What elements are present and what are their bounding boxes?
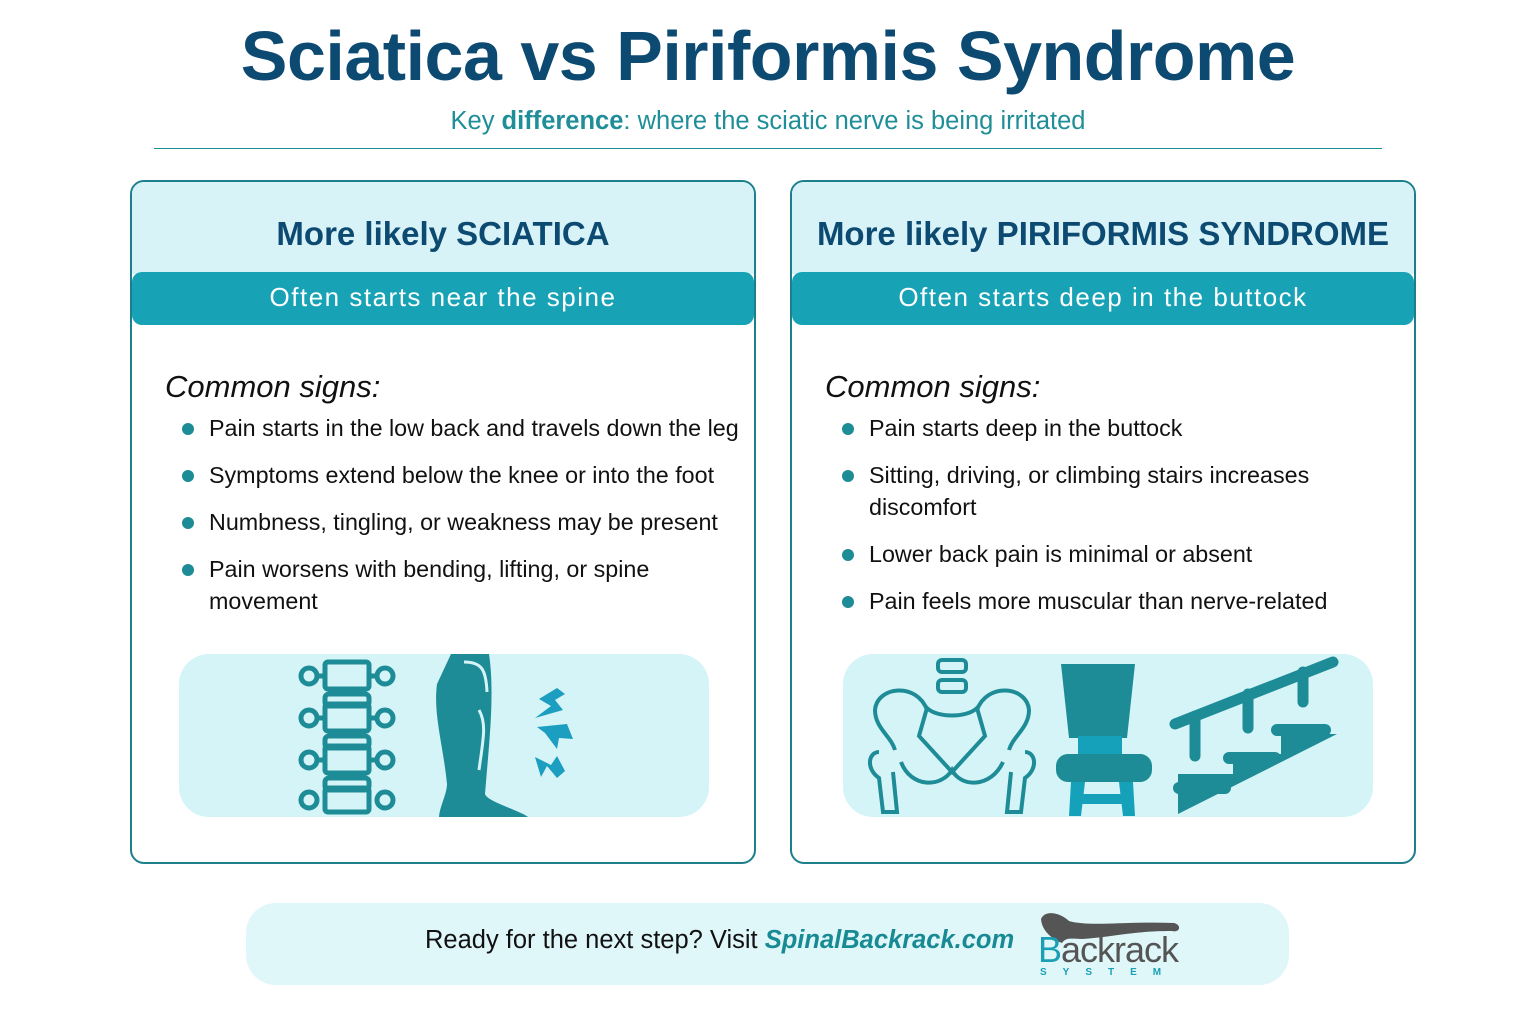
subtitle: Key difference: where the sciatic nerve is being irritated (451, 107, 1085, 135)
text: common signs: Common signs: (825, 369, 1040, 404)
logo: backrack: Backrack (1038, 929, 1178, 970)
text: common signs: Common signs: (165, 369, 380, 404)
footer banner (246, 903, 1289, 985)
icon: pelvis (870, 660, 1034, 812)
icon: chair (1061, 664, 1135, 738)
panel: sciatica (130, 180, 756, 864)
band: starts in buttock (792, 272, 1414, 325)
panel: piriformis (790, 180, 1416, 864)
list: piriformis signs: Sitting, driving, or climbing stairs increases discomfort (869, 462, 1309, 520)
footer text: Ready for the next step? Visit SpinalBackrack.com (425, 926, 1014, 954)
logo: backrack: SYSTEM (1040, 967, 1177, 978)
band: starts near spine: Often starts near the spine (270, 282, 616, 312)
icon: spine (301, 662, 393, 812)
icon: leg (436, 654, 529, 818)
icon: stairs (1173, 724, 1337, 814)
list: piriformis signs: Pain starts deep in the buttock (869, 415, 1182, 441)
list: sciatica signs: Pain starts in the low back and travels down the leg (209, 415, 739, 441)
list: sciatica signs: Pain worsens with bending, lifting, or spine movement (209, 556, 649, 614)
logo: backrack (1038, 913, 1180, 978)
list: sciatica signs: Symptoms extend below the knee or into the foot (209, 462, 714, 488)
icons: spine and leg (179, 654, 709, 817)
list: sciatica signs (182, 415, 739, 614)
list: sciatica signs: Numbness, tingling, or weakness may be present (209, 509, 718, 535)
list: piriformis signs: Pain feels more muscular than nerve-related (869, 588, 1327, 614)
band: starts in buttock: Often starts deep in the buttock (898, 282, 1308, 312)
heading: piriformis: More likely PIRIFORMIS SYNDROME (817, 215, 1389, 252)
heading: sciatica: More likely SCIATICA (276, 215, 610, 252)
band: starts near spine (132, 272, 754, 325)
icon: lightning (535, 688, 573, 778)
heading: piriformis (792, 182, 1414, 274)
list: piriformis signs (842, 415, 1327, 614)
title: Sciatica vs Piriformis Syndrome (241, 17, 1295, 95)
icons: pelvis chair stairs (843, 654, 1373, 817)
heading: sciatica (132, 182, 754, 274)
list: piriformis signs: Lower back pain is minimal or absent (869, 541, 1252, 567)
